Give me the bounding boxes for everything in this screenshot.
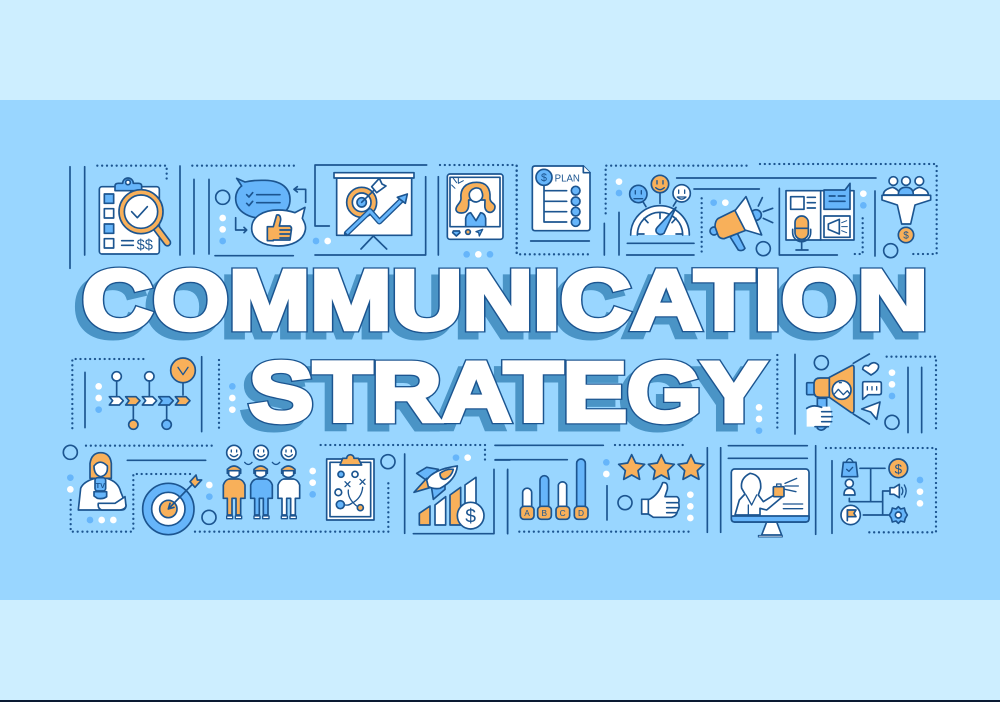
- icon: clipboard with magnifier: $$: [137, 238, 153, 254]
- top row left icons: [70, 165, 517, 268]
- bar chart A B C D: B: [542, 508, 548, 518]
- icon: social media photo card: [438, 165, 517, 258]
- title text fill: STRATEGY: [249, 345, 766, 439]
- icon: target with arrow: [143, 475, 216, 535]
- icon: marketing flow diagram: $: [895, 461, 903, 476]
- icon: monitor with woman presenting perfume: [731, 469, 809, 537]
- title shadow: STRATEGY: [242, 352, 759, 446]
- bar chart A B C D: D: [578, 508, 584, 518]
- middle row right icon: megaphone with media: [756, 354, 936, 434]
- title text fill: [82, 253, 928, 439]
- top row right icons: [517, 164, 937, 258]
- middle row left icon: timeline: [72, 357, 236, 432]
- icon: marketing flow diagram: [841, 459, 923, 525]
- icon: game plan clipboard: [309, 455, 395, 520]
- title text outline: COMMUNICATION: [82, 253, 928, 347]
- icon: speech bubbles with thumbs up: [216, 178, 306, 246]
- icon: rocket over growth bars with coin: $: [465, 507, 476, 528]
- icon: plan document: $: [541, 172, 547, 184]
- icon: plan document: [532, 166, 590, 231]
- icon: open magazine with microphone: [786, 183, 867, 250]
- icon: three stars and thumbs up: [618, 455, 704, 521]
- icon: plan document: PLAN: [555, 174, 580, 185]
- icon: clipboard with magnifier: [99, 178, 167, 254]
- title text outline: STRATEGY: [249, 345, 766, 439]
- icon: megaphone: [710, 197, 773, 256]
- title: communication strategy: [75, 253, 928, 446]
- title text outline: [82, 253, 928, 439]
- bar chart A B C D: [520, 459, 610, 519]
- icon: satisfaction gauge with faces: [616, 175, 690, 235]
- title text fill: COMMUNICATION: [82, 253, 928, 347]
- bar chart A B C D: C: [560, 508, 566, 518]
- bottom row right icons: [495, 445, 936, 537]
- icon: audience funnel with coin: $: [903, 231, 909, 242]
- bottom row left icons: [63, 445, 510, 535]
- bar chart A B C D: A: [524, 508, 530, 518]
- icon: three team members with smiles: [223, 445, 300, 519]
- title shadow: COMMUNICATION: [75, 260, 921, 354]
- icon: audience funnel with coin: [882, 177, 931, 258]
- icon: tv reporter: TV: [96, 481, 105, 490]
- icon: rocket over growth bars with coin: [414, 454, 484, 529]
- icon: presentation board with target and growth arrow: [313, 165, 427, 255]
- icon: tv reporter: [63, 445, 126, 523]
- title shadow: [75, 260, 921, 446]
